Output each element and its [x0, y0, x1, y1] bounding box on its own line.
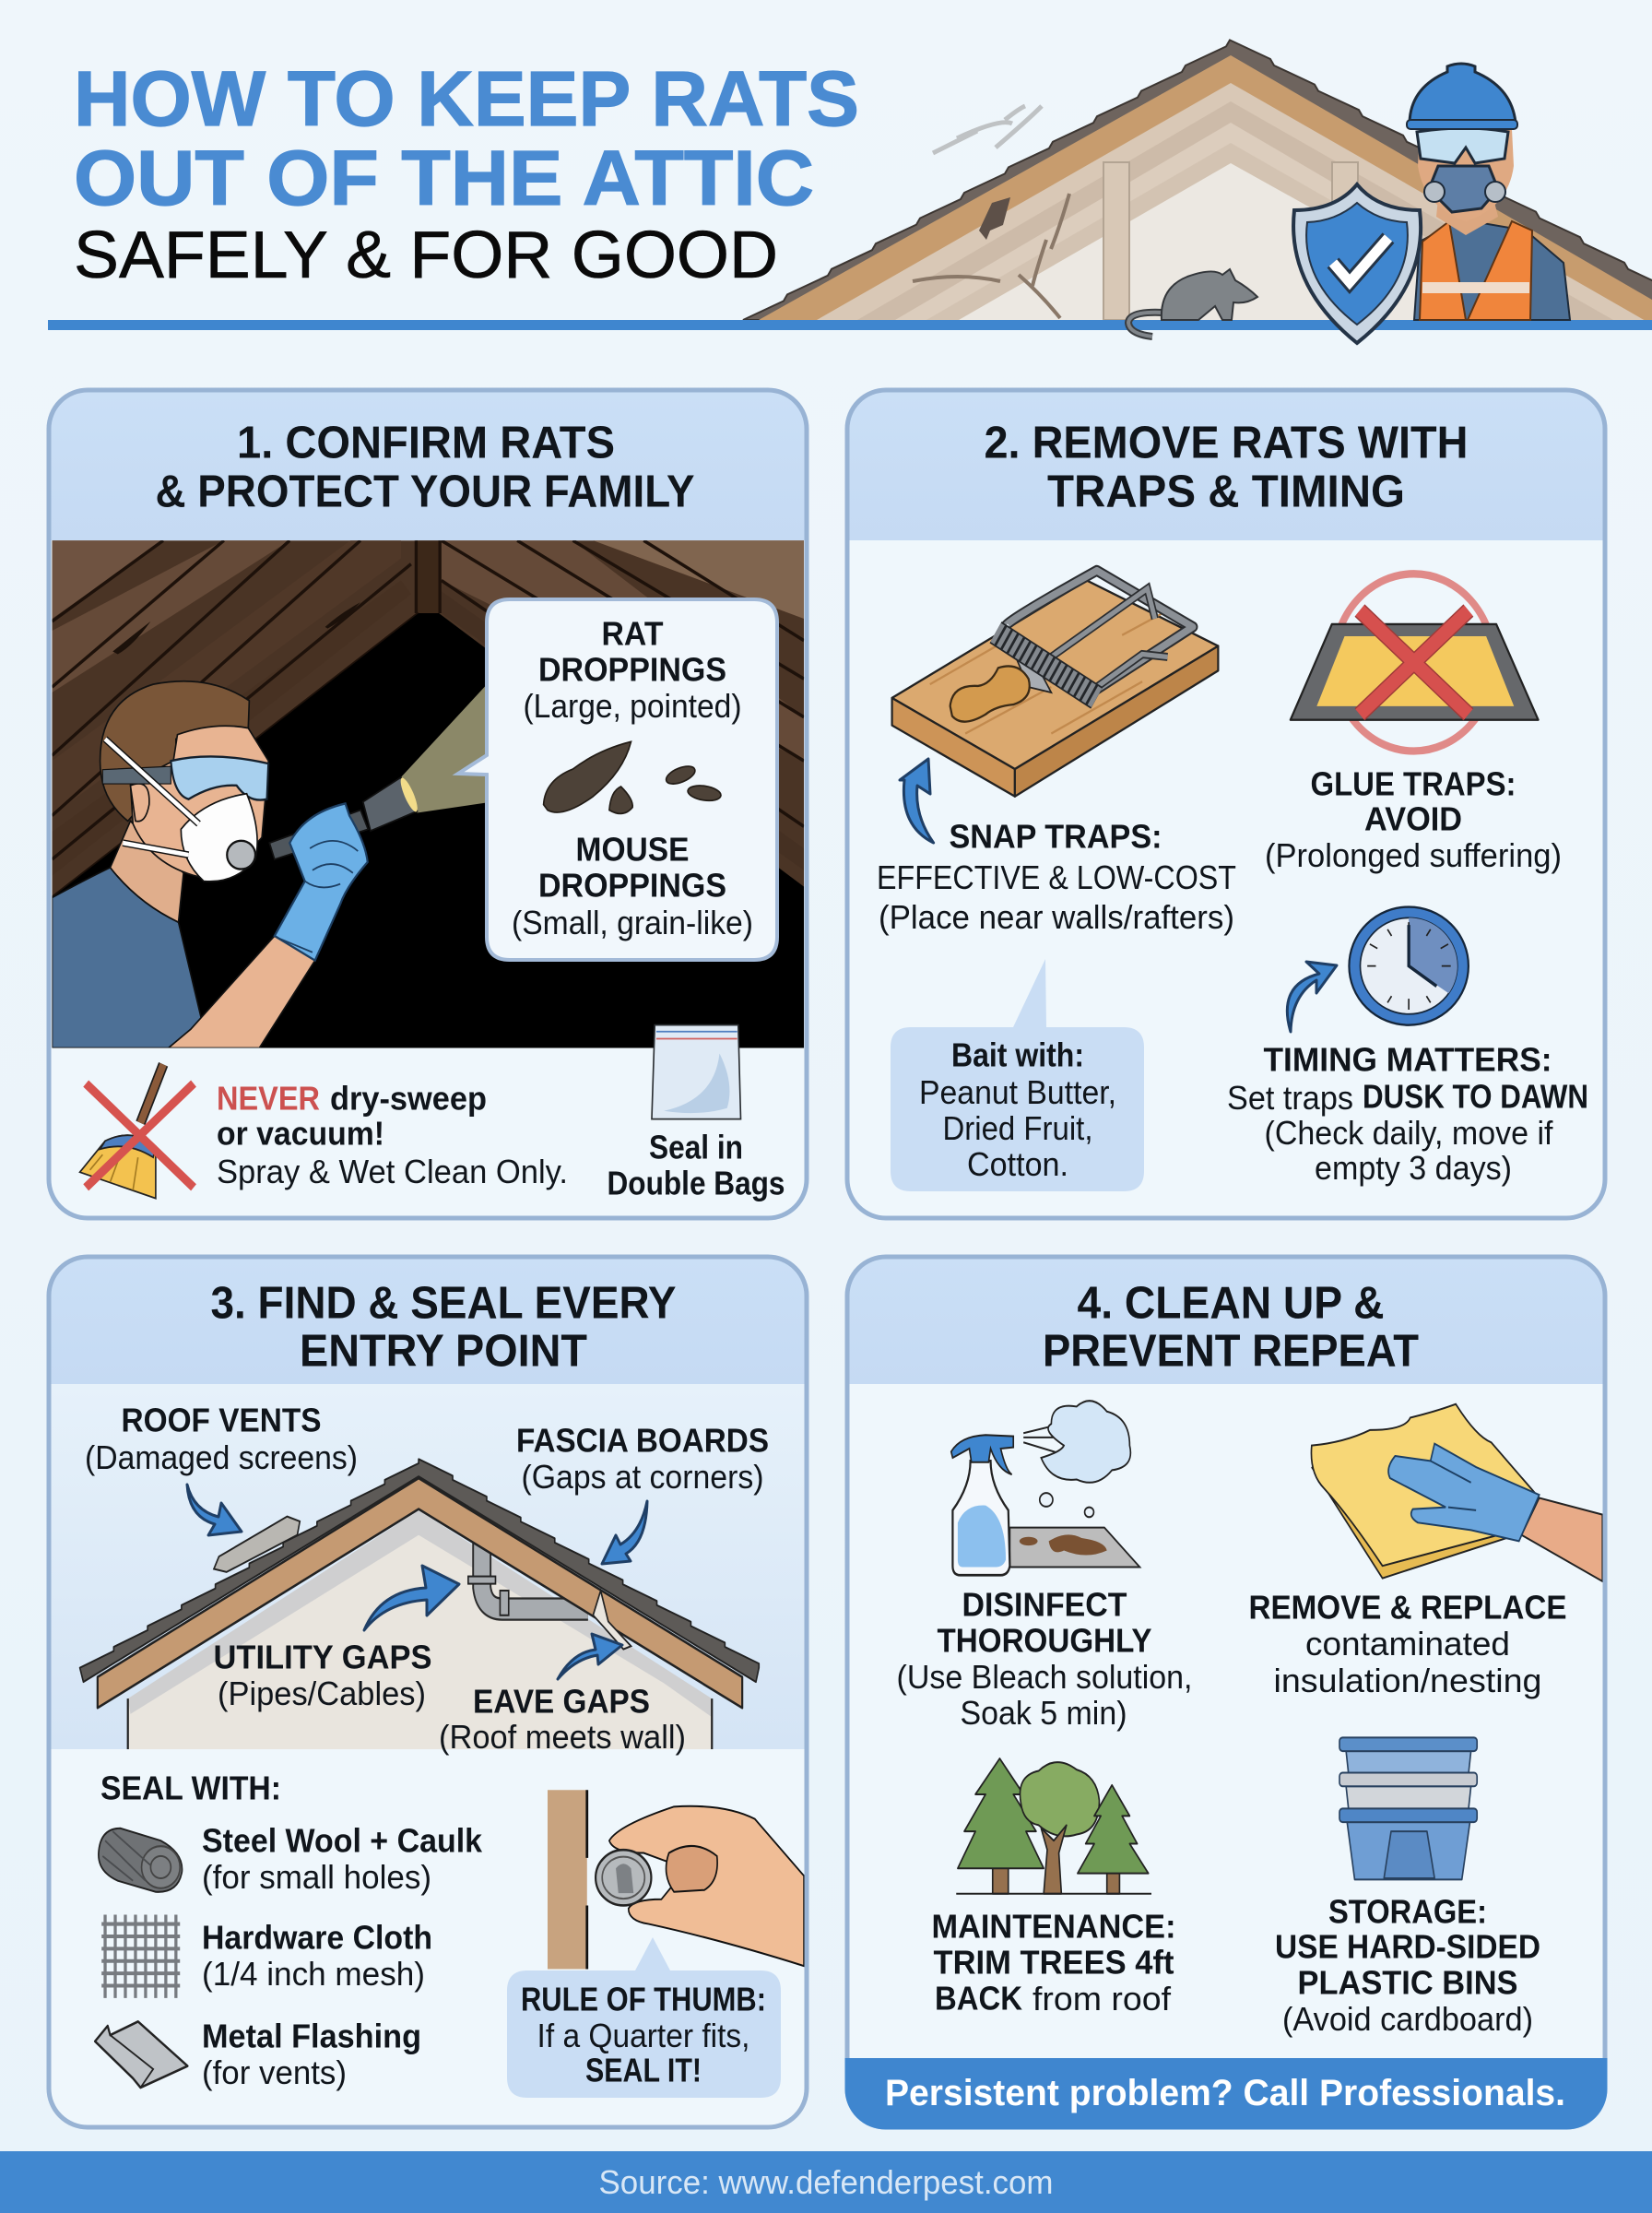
entry point labels: (Pipes/Cables)	[218, 1675, 426, 1712]
arrow: fascia boards	[602, 1501, 647, 1564]
callout: droppings comparison: (Small, grain-like)	[512, 904, 753, 941]
icon: gnawed damage	[913, 106, 1069, 318]
title: HOW TO KEEP RATS	[74, 55, 859, 142]
sealing materials list: (for small holes)	[202, 1858, 431, 1896]
heading: 3. FIND & SEAL EVERY	[210, 1278, 677, 1328]
snap trap text: SNAP TRAPS:	[950, 817, 1162, 856]
callout: droppings comparison: MOUSE	[575, 830, 690, 869]
heading: PREVENT REPEAT	[1043, 1326, 1419, 1376]
entry point labels: UTILITY GAPS	[214, 1638, 431, 1676]
call to action band	[844, 2058, 1608, 2132]
maintenance text	[931, 1907, 1176, 2018]
panel 1: confirm rats	[49, 390, 807, 1218]
heading	[155, 419, 695, 516]
icon: glue trap crossed out	[1291, 574, 1539, 751]
illustration: man inspecting attic with flashlight	[52, 540, 804, 1048]
call to action band: Persistent problem? Call Professionals.	[885, 2073, 1565, 2113]
remove and replace text: contaminated	[1305, 1625, 1510, 1663]
callout: rule of thumb: RULE OF THUMB:	[521, 1981, 766, 2018]
remove and replace text: insulation/nesting	[1274, 1662, 1541, 1699]
disinfect text: THOROUGHLY	[937, 1621, 1152, 1660]
disinfect text: (Use Bleach solution,	[896, 1658, 1193, 1696]
callout: bait: Dried Fruit,	[942, 1109, 1093, 1147]
heading	[210, 1278, 677, 1376]
heading: TRAPS & TIMING	[1047, 467, 1405, 516]
icon: crossed-out broom	[80, 1064, 194, 1199]
entry point labels: (Damaged screens)	[85, 1438, 358, 1476]
title: SAFELY & FOR GOOD	[74, 219, 778, 292]
timing text: DUSK TO DAWN	[1363, 1077, 1588, 1116]
warning text: or vacuum!	[217, 1114, 384, 1153]
storage text	[1275, 1892, 1540, 2038]
arrow: to clock	[1287, 962, 1337, 1032]
maintenance text: MAINTENANCE:	[931, 1907, 1176, 1946]
sealing materials list: SEAL WITH:	[100, 1769, 281, 1807]
callout: droppings comparison: (Large, pointed)	[524, 687, 741, 725]
callout: droppings comparison	[458, 599, 777, 960]
callout: droppings comparison: DROPPINGS	[538, 651, 726, 688]
glue trap text	[1265, 765, 1562, 874]
timing text: TIMING MATTERS:	[1263, 1040, 1552, 1079]
sealing materials list	[95, 1769, 483, 2091]
maintenance text: TRIM TREES 4ft	[933, 1944, 1174, 1981]
sealing materials list: (1/4 inch mesh)	[202, 1955, 425, 1993]
sealing materials list: Metal Flashing	[202, 2018, 421, 2054]
timing text: empty 3 days)	[1315, 1149, 1512, 1187]
illustration: worker with safety gear	[1407, 64, 1570, 320]
callout: droppings comparison: RAT	[601, 614, 664, 653]
icon: droppings	[544, 741, 722, 813]
callout: rule of thumb	[507, 1937, 781, 2098]
remove and replace text	[1248, 1588, 1567, 1699]
heading: 4. CLEAN UP &	[1077, 1278, 1385, 1328]
icon: metal flashing	[95, 2021, 187, 2088]
storage text: USE HARD-SIDED	[1275, 1927, 1540, 1966]
sealing materials list: Hardware Cloth	[202, 1918, 432, 1957]
heading	[1043, 1278, 1419, 1376]
disinfect text	[896, 1586, 1193, 1732]
heading: & PROTECT YOUR FAMILY	[155, 467, 695, 516]
heading	[985, 419, 1468, 516]
snap trap text: (Place near walls/rafters)	[879, 898, 1234, 936]
timing text: (Check daily, move if	[1265, 1114, 1553, 1152]
storage text: PLASTIC BINS	[1298, 1964, 1517, 2001]
remove and replace text: REMOVE & REPLACE	[1248, 1588, 1567, 1627]
bag caption: Seal in	[649, 1129, 743, 1166]
panel 4: clean up	[844, 1257, 1608, 2132]
callout: bait: Peanut Butter,	[919, 1073, 1116, 1111]
storage text: (Avoid cardboard)	[1282, 2000, 1533, 2038]
entry point labels: (Gaps at corners)	[522, 1458, 763, 1496]
callout: droppings comparison: DROPPINGS	[538, 867, 726, 904]
heading: 1. CONFIRM RATS	[237, 419, 615, 468]
entry point labels: ROOF VENTS	[122, 1402, 321, 1438]
callout: bait: Bait with:	[951, 1036, 1084, 1073]
bag caption: Double Bags	[607, 1164, 785, 1202]
title: OUT OF THE ATTIC	[74, 135, 814, 221]
glue trap text: AVOID	[1364, 800, 1462, 837]
icon: stacked plastic bins	[1339, 1737, 1477, 1879]
illustration: attic roof	[743, 40, 1652, 325]
bag caption	[607, 1129, 785, 1202]
disinfect text: Soak 5 min)	[961, 1694, 1127, 1732]
callout: bait	[891, 959, 1144, 1191]
sealing materials list: (for vents)	[202, 2053, 347, 2091]
icon: rat	[1128, 269, 1257, 337]
snap trap text	[877, 817, 1236, 936]
panel 3: seal entry points	[49, 1257, 807, 2127]
arrow: eave gaps	[558, 1634, 622, 1679]
warning text: NEVER	[217, 1079, 320, 1118]
icon: hardware cloth	[101, 1915, 180, 1998]
header rule	[48, 320, 1652, 330]
warning text: Spray & Wet Clean Only.	[217, 1153, 568, 1190]
disinfect text: DISINFECT	[962, 1586, 1127, 1623]
panel 2: traps and timing	[847, 390, 1605, 1218]
illustration: house roof with entry points	[80, 1459, 759, 1749]
glue trap text: GLUE TRAPS:	[1311, 765, 1516, 802]
entry point labels: EAVE GAPS	[473, 1682, 650, 1721]
snap trap text: EFFECTIVE & LOW-COST	[877, 858, 1236, 896]
storage text: STORAGE:	[1328, 1892, 1487, 1931]
timing text	[1227, 1040, 1588, 1187]
icon: spray bottle	[951, 1401, 1139, 1575]
callout: rule of thumb: SEAL IT!	[585, 2051, 702, 2089]
maintenance text: BACK	[935, 1979, 1022, 2018]
maintenance text: from roof	[1032, 1980, 1172, 2018]
arrow: utility gaps	[364, 1566, 459, 1630]
heading: 2. REMOVE RATS WITH	[985, 419, 1468, 468]
entry point labels: FASCIA BOARDS	[516, 1422, 769, 1459]
warning text: dry-sweep	[330, 1079, 487, 1118]
icon: insulation and gloved hand	[1311, 1404, 1602, 1581]
heading: ENTRY POINT	[300, 1326, 587, 1376]
title	[74, 55, 859, 292]
icon: sealed bag	[652, 1025, 741, 1119]
glue trap text: (Prolonged suffering)	[1265, 836, 1562, 874]
arrow: roof vents	[187, 1485, 242, 1535]
footer source bar	[0, 2151, 1652, 2213]
timing text: Set traps	[1227, 1079, 1353, 1117]
arrow: to snap trap	[900, 759, 934, 843]
icon: steel wool	[99, 1828, 183, 1892]
callout: bait: Cotton.	[967, 1145, 1068, 1183]
illustration: quarter test with hand	[548, 1790, 804, 1969]
entry point labels: (Roof meets wall)	[439, 1718, 686, 1756]
entry point labels	[85, 1402, 769, 1756]
footer source bar: Source: www.defenderpest.com	[599, 2163, 1053, 2201]
icon: shield with check	[1293, 184, 1421, 343]
icon: clock	[1349, 907, 1469, 1025]
icon: trees	[956, 1758, 1151, 1894]
callout: rule of thumb: If a Quarter fits,	[537, 2017, 750, 2054]
warning text	[217, 1079, 568, 1190]
sealing materials list: Steel Wool + Caulk	[202, 1822, 483, 1859]
icon: snap trap	[892, 571, 1218, 797]
